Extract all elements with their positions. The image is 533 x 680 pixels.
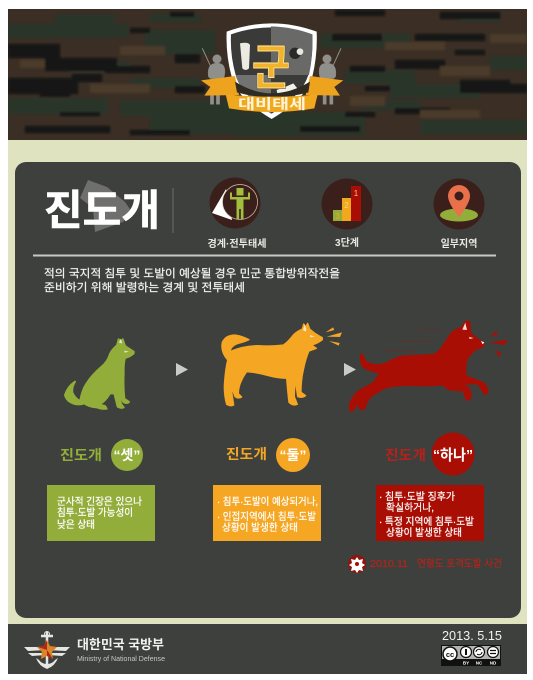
intro text: 적의 국지적 침투 및 도발이 예상될 경우 민군 통합방위작전을 <box>44 266 340 280</box>
icon: map pin <box>434 178 484 230</box>
icon: explosion <box>348 555 366 573</box>
box: stage one: · 침투·도발 징후가 <box>379 491 455 503</box>
icon: red running dog <box>350 322 508 411</box>
stage two heading: 진도개 <box>226 446 267 462</box>
emblem heading: 군 <box>252 42 290 95</box>
box: stage one: · 특정 지역에 침투·도발 <box>379 516 474 528</box>
icon: green sitting dog <box>65 339 134 409</box>
licence badge: ND <box>490 660 497 666</box>
licence badge: cc <box>446 650 454 659</box>
box: stage three: 군사적 긴장은 있으나 <box>57 496 142 508</box>
ribbon <box>201 76 239 96</box>
icon: left soldier <box>202 48 225 104</box>
stage three heading <box>60 439 143 471</box>
emblem: shield with banner <box>201 23 343 119</box>
licence badge <box>441 645 501 666</box>
box: stage two <box>213 485 321 541</box>
ministry logo <box>24 632 70 669</box>
icon: orange barking dog <box>222 323 342 406</box>
page background <box>8 140 527 624</box>
box: stage two: · 침투·도발이 예상되거나, <box>217 496 318 508</box>
ministry name: 대한민국 국방부 <box>77 637 164 652</box>
icon: grey dog head <box>80 180 132 232</box>
icon: right soldier <box>319 48 341 104</box>
event note <box>348 555 502 573</box>
label: 경계·전투태세 <box>208 237 266 250</box>
box: stage one: 확실하거나, <box>386 501 434 514</box>
stage three heading: “셋” <box>114 447 140 463</box>
stage one heading <box>385 432 474 476</box>
licence badge: NC <box>476 660 483 666</box>
stage three heading: 진도개 <box>60 447 102 463</box>
ministry name: Ministry of National Defense <box>77 656 165 663</box>
icon: three levels: 1 <box>354 189 359 198</box>
stage two heading <box>226 438 310 472</box>
box: stage three: 침투·도발 가능성이 <box>57 507 133 519</box>
date: 2013. 5.15 <box>442 629 502 643</box>
box: stage two: 상황이 발생한 상태 <box>222 522 298 534</box>
stage one heading: “하나” <box>433 447 473 464</box>
icon: three levels: 3 <box>335 212 340 221</box>
icon: three levels: 2 <box>344 201 349 210</box>
licence badge: BY <box>463 660 469 666</box>
stage two heading: “둘” <box>280 447 306 463</box>
title block: 진도개 <box>44 187 160 234</box>
intro text <box>44 266 340 294</box>
label: 일부지역 <box>441 237 477 250</box>
box: stage two: · 인접지역에서 침투·도발 <box>217 511 316 523</box>
event note: 연평도 포격도발 사건 <box>417 557 502 570</box>
main dark panel <box>15 162 521 618</box>
box: stage one: 상황이 발생한 상태 <box>386 527 462 539</box>
arrow <box>344 363 356 376</box>
emblem: shield with banner: 군 <box>252 42 290 95</box>
footer bar <box>8 624 527 674</box>
ministry name <box>77 637 165 663</box>
emblem: shield with banner: 대비태세 <box>238 96 306 112</box>
box: stage three <box>47 485 155 541</box>
box: stage one <box>376 485 484 541</box>
header camouflage banner <box>8 9 527 140</box>
label: 3단계 <box>335 236 359 249</box>
box: stage three: 낮은 상태 <box>57 519 95 531</box>
arrow <box>176 363 188 376</box>
event note: 2010.11 <box>370 559 408 570</box>
intro text: 준비하기 위해 발령하는 경계 및 전투태세 <box>44 280 245 294</box>
stage one heading: 진도개 <box>385 447 426 463</box>
icon: readiness <box>210 178 260 228</box>
shield <box>227 23 317 119</box>
icon: three levels <box>322 178 372 230</box>
